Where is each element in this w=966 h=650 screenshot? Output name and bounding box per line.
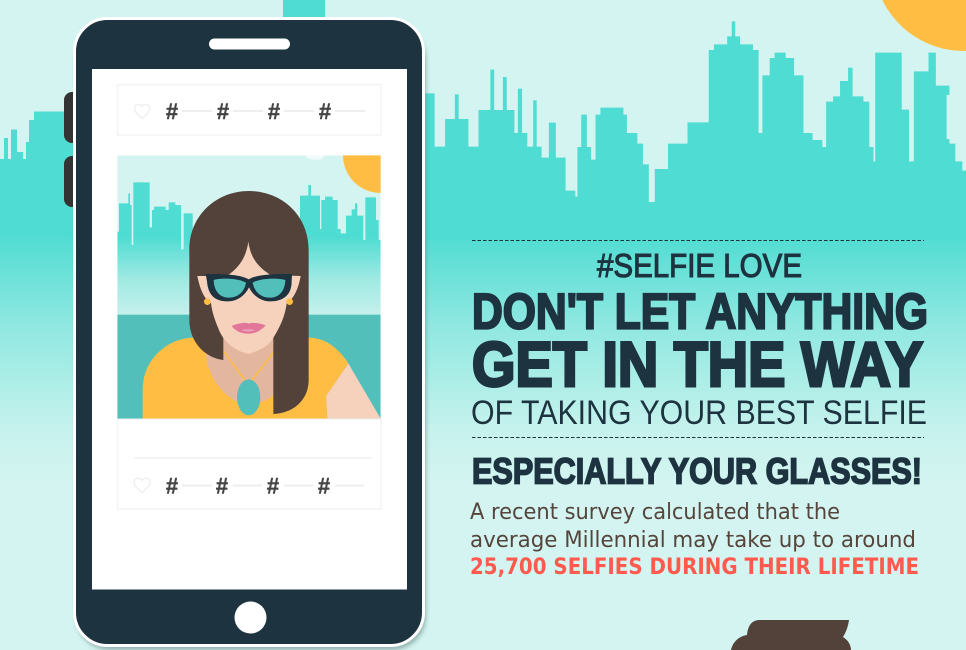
phone: [64, 18, 426, 650]
hashtags: #: [268, 99, 280, 124]
body text: average Millennial may take up to around: [470, 527, 916, 553]
hashtag heading: #SELFIE LOVE: [597, 247, 802, 284]
heart icon: [134, 478, 150, 492]
body text: A recent survey calculated that the: [470, 499, 840, 525]
sunglasses: [206, 274, 292, 301]
hair: [189, 191, 309, 414]
headline line 2: GET IN THE WAY: [472, 330, 923, 400]
selfie photo: [117, 155, 381, 419]
skyline right: [417, 21, 966, 240]
highlighted statistic: 25,700 SELFIES DURING THEIR LIFETIME: [470, 554, 919, 580]
arm: [326, 363, 381, 419]
top hashtag card: [118, 84, 381, 135]
sun: [873, 0, 966, 51]
body text: [470, 499, 916, 553]
photo skyline: [117, 182, 381, 315]
home button: [234, 602, 266, 634]
hashtags: #: [216, 474, 228, 498]
bottom hashtag card: [118, 419, 381, 509]
skyline left: [0, 112, 80, 650]
water: [117, 315, 381, 419]
hashtags: #: [217, 99, 229, 124]
hashtags: #: [166, 99, 178, 124]
photo sun: [343, 155, 381, 193]
phone body: [74, 18, 424, 646]
hashtags: #: [166, 474, 178, 498]
heart icon: [134, 104, 150, 118]
hashtags: #: [319, 99, 331, 124]
skyline gradient base: [0, 205, 966, 650]
bottom dashed divider: [472, 436, 924, 438]
lips: [232, 323, 266, 334]
face: [197, 242, 301, 354]
neck: [206, 338, 274, 403]
top dashed divider: [472, 240, 924, 242]
small teal block above phone: [283, 0, 325, 18]
hashtags: #: [267, 474, 279, 498]
shirt: [143, 338, 348, 419]
hashtags: [166, 99, 331, 124]
hashtags: [166, 474, 330, 498]
screen: [92, 69, 407, 590]
earrings: [204, 298, 211, 305]
side buttons: [64, 92, 84, 207]
hair peeking at bottom: [731, 620, 851, 650]
speaker: [209, 38, 290, 50]
pendant: [237, 379, 260, 415]
hashtags: #: [318, 474, 330, 498]
phone shadow: [76, 26, 426, 650]
necklace: [224, 352, 274, 385]
